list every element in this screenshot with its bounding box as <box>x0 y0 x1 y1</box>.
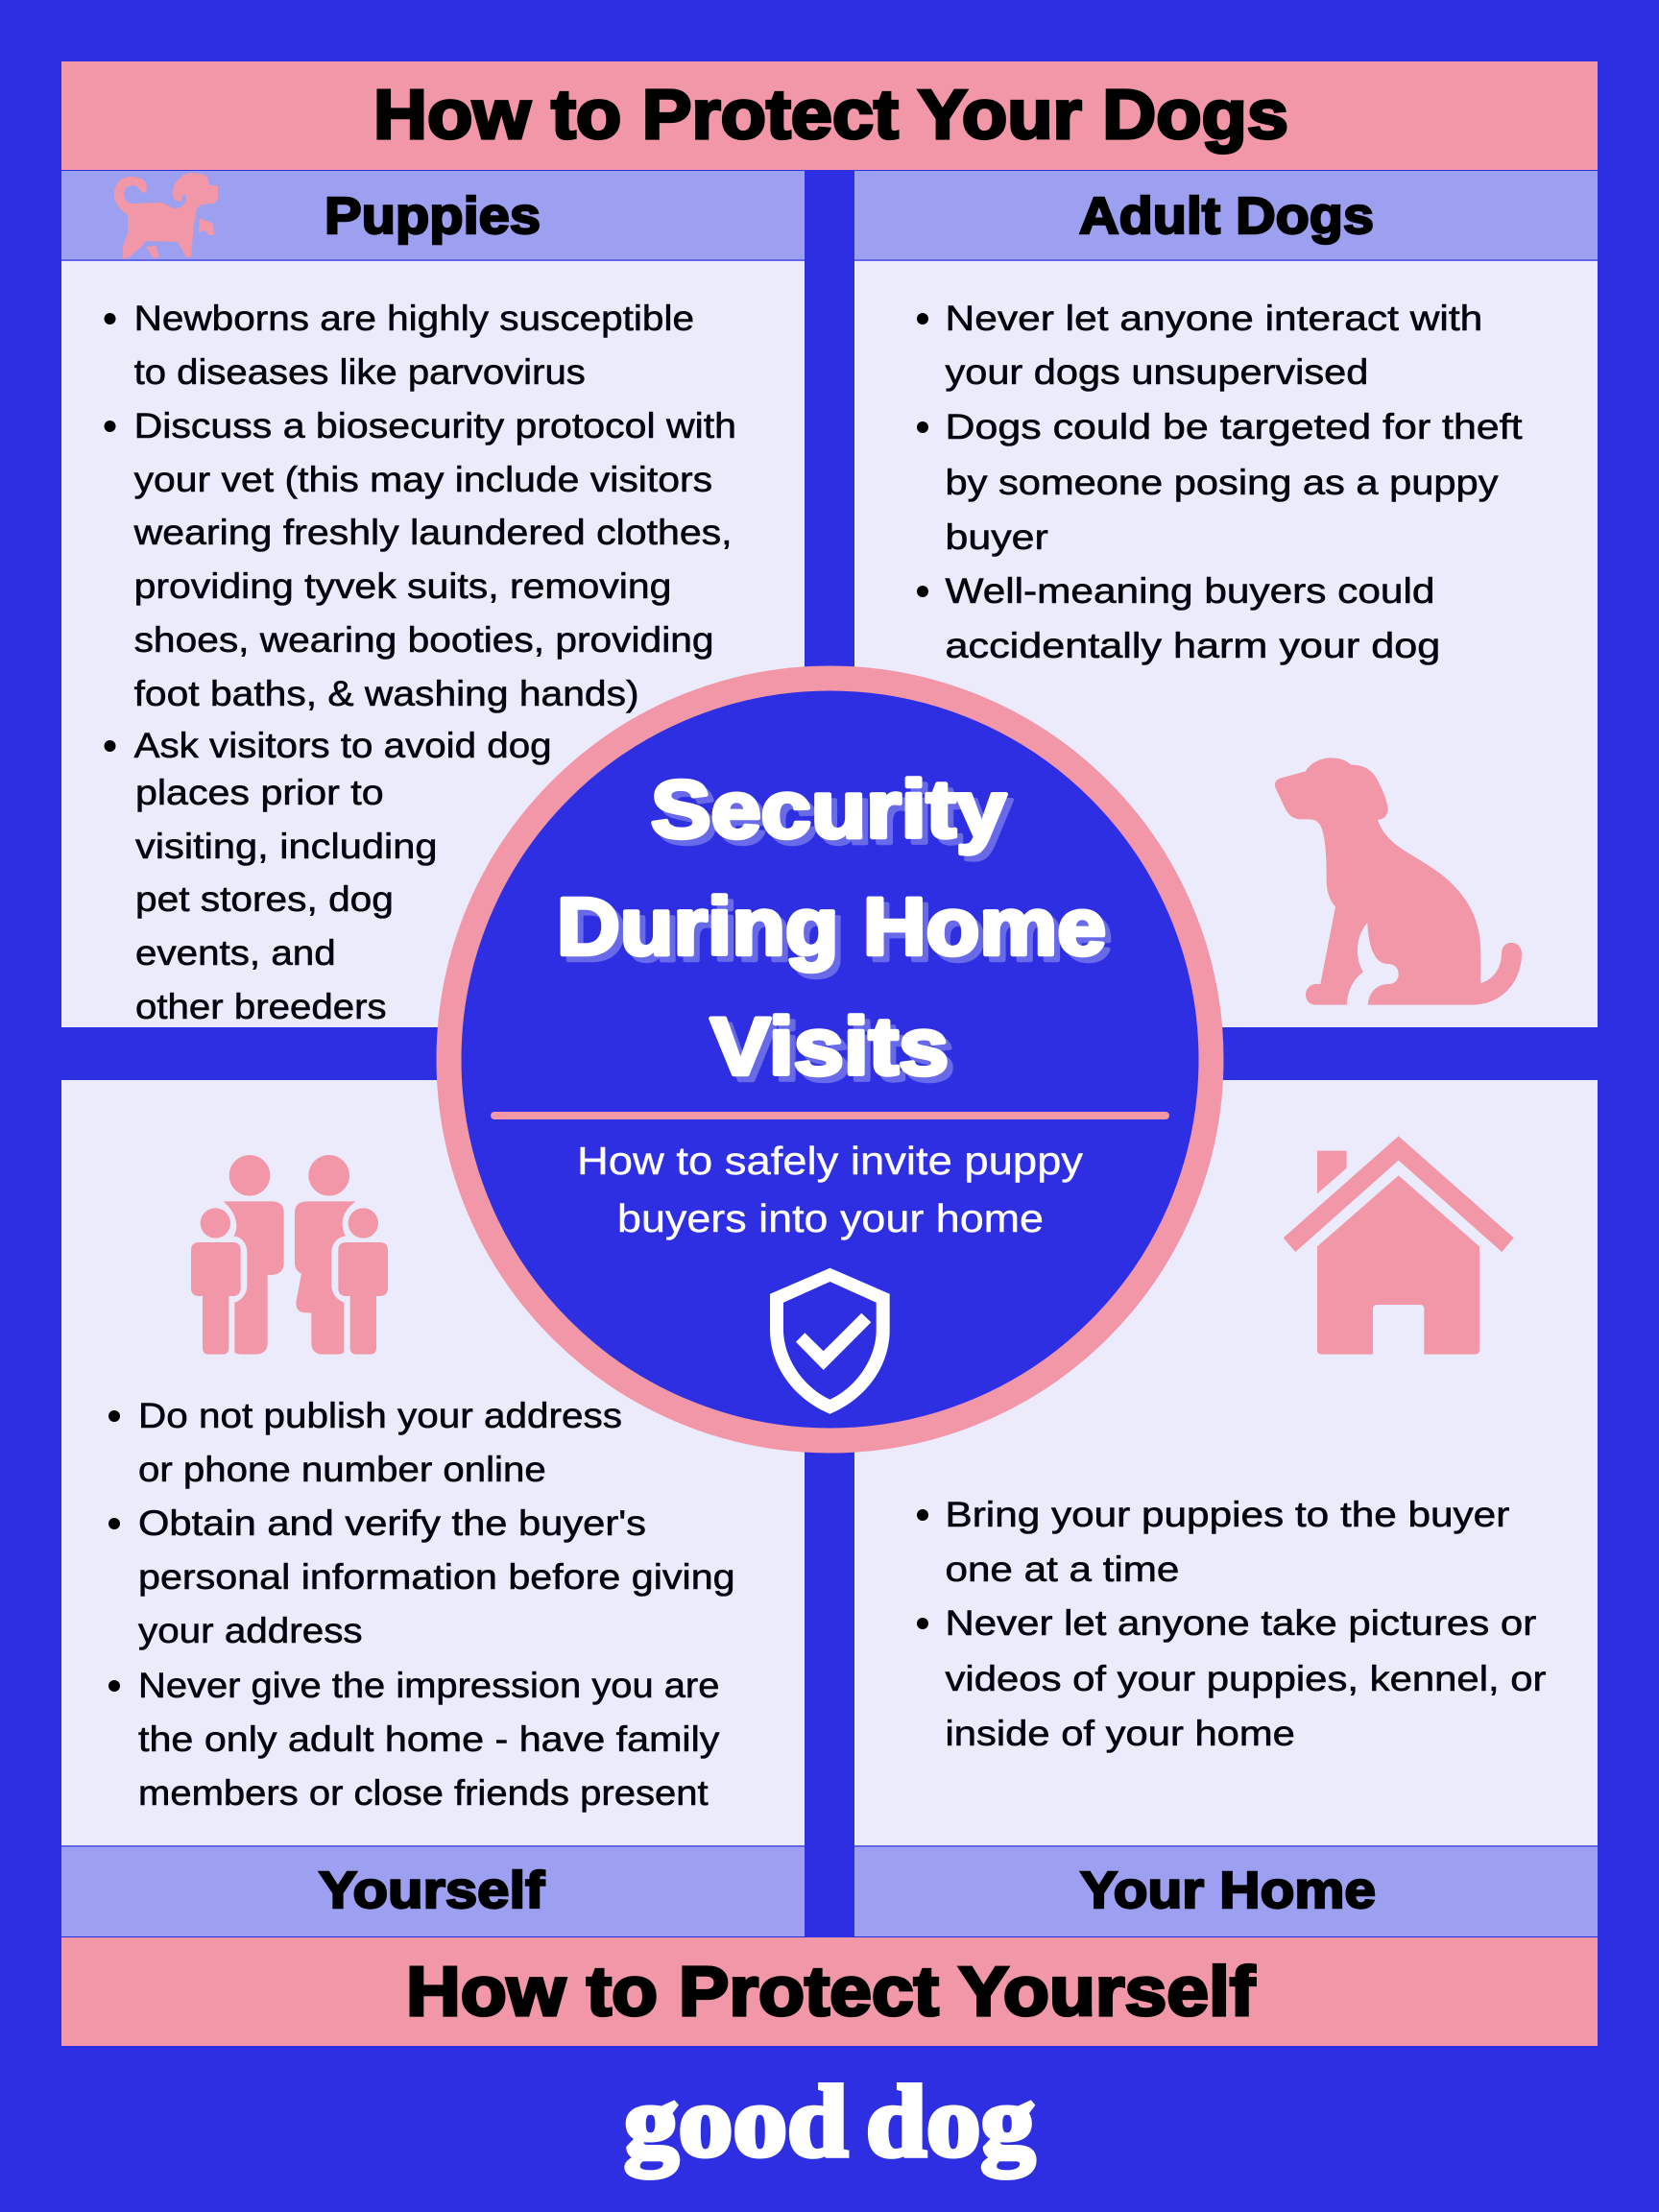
heading: puppies: Puppies <box>325 187 541 245</box>
banner: how to protect yourself <box>61 1937 1598 2046</box>
center circle badge <box>449 678 1212 1440</box>
heading: yourself: Yourself <box>319 1862 545 1919</box>
text: puppies bullets: your vet (this may include visitors <box>134 460 712 499</box>
text: yourself bullets: Never give the impression you are <box>138 1666 719 1705</box>
text: adult dogs bullets: buyer <box>945 517 1048 557</box>
panel: adult dogs <box>854 171 1598 1027</box>
text: your home bullets: one at a time <box>945 1550 1179 1589</box>
text: your home bullets: inside of your home <box>945 1714 1295 1753</box>
title: security during home visits: During Home <box>557 881 1106 972</box>
title: security during home visits: Security <box>651 764 1006 854</box>
title shadow: Visits <box>716 1007 954 1097</box>
text: yourself bullets <box>108 1396 735 1813</box>
text: puppies bullets: places prior to <box>135 773 384 812</box>
text: yourself bullets: the only adult home - have family <box>138 1719 720 1759</box>
subtitle: buyers into your home <box>617 1196 1044 1240</box>
text: puppies bullets: wearing freshly laundered clothes, <box>132 513 733 552</box>
text: adult dogs bullets: Well-meaning buyers could <box>945 571 1434 611</box>
text: your home bullets: Bring your puppies to the buyer <box>945 1495 1509 1534</box>
title shadow <box>563 770 1112 1097</box>
title: security during home visits: Visits <box>710 1001 949 1092</box>
text: puppies bullets: Ask visitors to avoid dog <box>134 726 552 765</box>
text: your home bullets: videos of your puppies, kennel, or <box>945 1659 1546 1698</box>
banner: how to protect your dogs: How to Protect Your Dogs <box>373 77 1288 154</box>
text: puppies bullets: shoes, wearing booties, providing <box>134 620 714 660</box>
subtitle <box>577 1139 1084 1240</box>
text: puppies bullets: providing tyvek suits, removing <box>134 566 671 606</box>
text: puppies bullets: to diseases like parvovirus <box>134 352 586 392</box>
subtitle: How to safely invite puppy <box>577 1139 1084 1183</box>
icon: sitting dog <box>1275 757 1522 1005</box>
text: adult dogs bullets: your dogs unsupervised <box>945 352 1368 392</box>
text: your home bullets: Never let anyone take pictures or <box>945 1603 1536 1643</box>
panel: your home <box>854 1080 1598 1936</box>
text: puppies bullets: other breeders <box>135 987 387 1026</box>
logo: good dog: dog <box>866 2065 1035 2177</box>
text: puppies bullets: pet stores, dog <box>135 879 394 919</box>
text: yourself bullets: your address <box>138 1611 363 1650</box>
heading: adult dogs: Adult Dogs <box>1079 187 1374 245</box>
panel: puppies <box>61 171 805 1027</box>
text: adult dogs bullets: Dogs could be targeted for theft <box>945 407 1523 446</box>
text: yourself bullets: members or close friends present <box>138 1773 709 1813</box>
banner: how to protect yourself: How to Protect Yourself <box>406 1954 1256 2031</box>
icon: family <box>191 1155 388 1355</box>
text: adult dogs bullets: by someone posing as a puppy <box>945 463 1499 502</box>
logo: good dog <box>624 2065 1035 2177</box>
title shadow: During Home <box>563 887 1112 977</box>
text: puppies bullets: Newborns are highly susceptible <box>134 299 694 338</box>
logo: good dog: good <box>624 2065 848 2177</box>
title shadow: Security <box>657 770 1012 860</box>
icon: puppy <box>114 173 218 259</box>
text: adult dogs bullets: accidentally harm your dog <box>945 626 1440 665</box>
heading: your home: Your Home <box>1080 1862 1376 1919</box>
text: yourself bullets: personal information before giving <box>138 1557 735 1597</box>
text: yourself bullets: or phone number online <box>138 1450 546 1489</box>
text: adult dogs bullets: Never let anyone interact with <box>945 299 1482 338</box>
text: puppies bullets: foot baths, & washing hands) <box>134 674 639 713</box>
text: yourself bullets: Obtain and verify the buyer's <box>138 1503 646 1543</box>
text: adult dogs bullets <box>917 299 1523 665</box>
text: yourself bullets: Do not publish your address <box>138 1396 622 1435</box>
text: puppies bullets <box>104 299 736 1026</box>
text: puppies bullets: visiting, including <box>135 827 438 866</box>
title: security during home visits <box>557 764 1106 1092</box>
text: puppies bullets: Discuss a biosecurity protocol with <box>134 406 736 445</box>
text: your home bullets <box>917 1495 1546 1753</box>
text: puppies bullets: events, and <box>135 933 336 973</box>
banner: how to protect your dogs <box>61 61 1598 170</box>
panel: yourself <box>61 1080 805 1936</box>
icon: house <box>1284 1136 1514 1355</box>
icon: shield with check <box>770 1268 890 1414</box>
